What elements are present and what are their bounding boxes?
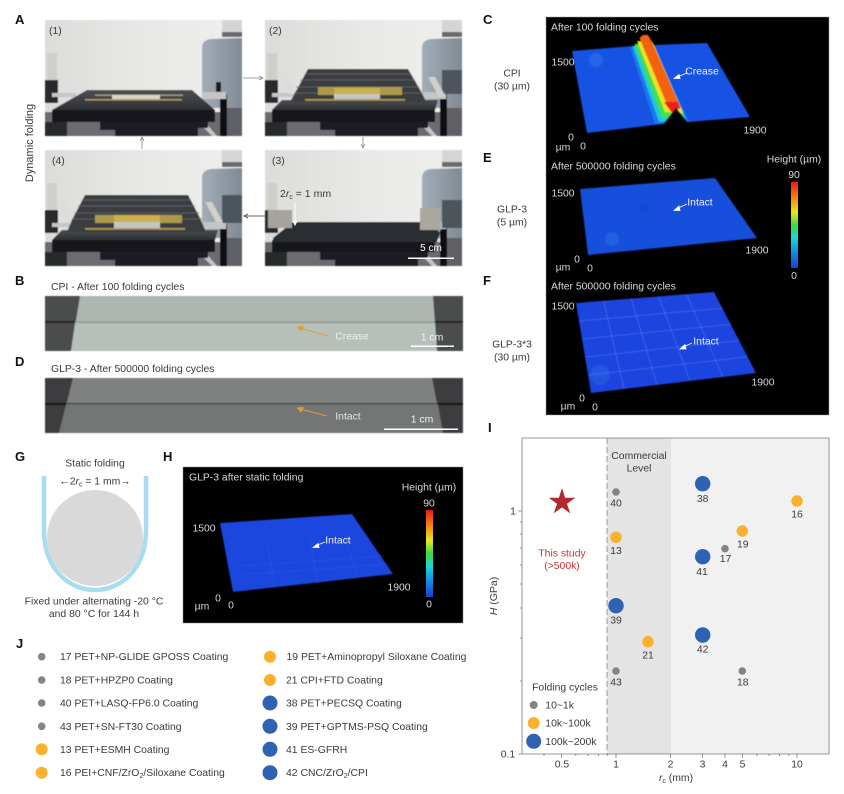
map F: GLP-3*3 intact surface: Intact — [693, 336, 719, 348]
panel letter I: I — [488, 420, 492, 435]
data points: 38 — [697, 494, 709, 505]
panel letter C: C — [483, 12, 493, 27]
x axis tick labels: 2 — [668, 760, 674, 770]
legend: folding cycles — [526, 682, 598, 749]
panel letter F: F — [483, 273, 491, 288]
right legend column: 39 PET+GPTMS-PSQ Coating — [286, 722, 428, 733]
height colour bar C/E/F: 90 — [788, 170, 800, 181]
data points: 39 — [610, 616, 622, 626]
left legend column — [36, 652, 229, 780]
y axis title: H (GPa) — [488, 577, 500, 615]
photo 4: rig unfolding — [45, 150, 242, 266]
panel letter H: H — [163, 449, 172, 464]
black panel H: µm — [195, 602, 209, 612]
blue film U shape — [44, 476, 146, 590]
x axis tick labels: 3 — [700, 760, 706, 770]
label (4): (4) — [52, 156, 65, 167]
heading B: CPI - After 100 folding cycles — [51, 282, 184, 293]
x axis tick labels: 0.5 — [555, 760, 569, 770]
right legend column: 19 PET+Aminopropyl Siloxane Coating — [286, 652, 467, 663]
left legend column: /Siloxane Coating — [143, 768, 225, 779]
legend: folding cycles: Folding cycles — [532, 682, 598, 694]
x axis tick labels: 5 — [740, 760, 746, 770]
data points: 43 — [610, 678, 622, 688]
shaded region right — [671, 438, 829, 754]
left legend column: 43 PET+SN-FT30 Coating — [60, 722, 182, 733]
arrow 2 to 3 — [361, 137, 365, 148]
map C: CPI crease surface: 0 — [580, 142, 586, 152]
left legend column: 18 PET+HPZP0 Coating — [60, 676, 173, 686]
x axis title: r — [659, 773, 663, 784]
label (3): (3) — [272, 156, 285, 167]
annotation 2rc = 1 mm: c — [289, 194, 293, 201]
panel letter E: E — [483, 150, 492, 165]
map F: GLP-3*3 intact surface — [551, 282, 775, 414]
data points: 40 — [610, 498, 622, 510]
map E: GLP-3 intact surface: 1500 — [551, 188, 575, 200]
map F: GLP-3*3 intact surface: 1900 — [751, 378, 775, 388]
map C: CPI crease surface: After 100 folding cycles — [551, 22, 658, 34]
right legend column: /CPI — [348, 768, 368, 779]
black panel: 3D height maps C, E, F — [546, 17, 829, 415]
black panel H: GLP-3 after static folding — [189, 472, 304, 484]
map E: GLP-3 intact surface: µm — [556, 262, 570, 274]
heading Static folding: Static folding — [65, 458, 125, 470]
annotation 2rc = 1 mm: = 1 mm — [293, 188, 331, 200]
panel B: CPI crease photo — [15, 273, 463, 351]
map E: GLP-3 intact surface — [551, 162, 769, 274]
panel D: GLP-3 intact photo — [15, 354, 463, 433]
height colour bar C/E/F — [767, 154, 821, 282]
photo D — [45, 378, 463, 433]
x axis title: c — [662, 778, 666, 785]
map E: GLP-3 intact surface: 0 — [574, 254, 580, 266]
rotated label: Dynamic folding: Dynamic folding — [24, 104, 36, 182]
black panel H: 0 — [215, 594, 221, 604]
panel A: dynamic folding photos — [15, 12, 462, 266]
dimension 2rc = 1 mm: c — [79, 482, 83, 488]
map F: GLP-3*3 intact surface: 0 — [579, 394, 585, 404]
black panel H: 0 — [228, 600, 234, 612]
data points: 18 — [737, 678, 749, 688]
sample label GLP-3*3 30 um: (30 µm) — [494, 352, 530, 364]
sample label GLP-3 5 um: (5 µm) — [497, 218, 527, 228]
x axis tick labels — [555, 760, 803, 770]
left legend column: 13 PET+ESMH Coating — [60, 745, 170, 756]
data points: 19 — [737, 540, 749, 550]
black panel H: Height (µm) — [402, 482, 456, 494]
right legend column: 2 — [344, 773, 348, 780]
height colour bar C/E/F: Height (µm) — [767, 154, 821, 166]
sample label GLP-3*3 30 um: GLP-3*3 — [492, 340, 532, 350]
panel G: static folding diagram — [15, 449, 164, 620]
label (2): (2) — [269, 26, 282, 37]
panel letter B: B — [15, 273, 24, 288]
x axis tick labels: 4 — [722, 760, 728, 770]
heading D: GLP-3 - After 500000 folding cycles — [51, 364, 214, 375]
dashed boundary — [606, 438, 608, 754]
height colour bar C/E/F: 0 — [791, 271, 797, 282]
panel letter G: G — [15, 449, 25, 464]
right legend column: 41 ES-GFRH — [286, 745, 347, 756]
label This study: (>500k) — [544, 561, 580, 572]
arrow 3 to 4 — [244, 214, 265, 218]
map C: CPI crease surface: 1500 — [551, 58, 575, 68]
scale bar 1 cm — [411, 332, 454, 347]
sample label GLP-3 5 um: GLP-3 — [497, 204, 527, 216]
map C: CPI crease surface — [551, 22, 767, 154]
sample label CPI: CPI — [503, 68, 521, 80]
right legend column: 21 CPI+FTD Coating — [286, 676, 383, 686]
y axis tick labels: 1 — [510, 506, 516, 518]
panel letter J: J — [16, 636, 23, 651]
caption: and 80 °C for 144 h — [49, 609, 139, 620]
data points: 41 — [696, 567, 708, 578]
photo 2: folding rig mid-fold — [265, 20, 462, 136]
black panel H: Intact — [325, 536, 351, 546]
data points: 16 — [791, 510, 803, 520]
plot frame and ticks — [518, 438, 829, 758]
map F: GLP-3*3 intact surface: µm — [561, 402, 575, 412]
panel letter A: A — [15, 12, 25, 27]
x axis tick labels: 10 — [791, 760, 803, 770]
legend: folding cycles: 10k~100k — [545, 718, 591, 730]
right legend column — [262, 651, 467, 780]
data points: 17 — [720, 554, 731, 565]
map E: GLP-3 intact surface: After 500000 folding cycles — [551, 162, 676, 172]
photo B — [45, 296, 463, 351]
photo 3: rig fully folded — [265, 150, 462, 266]
caption: Fixed under alternating -20 °C — [25, 596, 164, 608]
map E: GLP-3 intact surface: 0 — [587, 264, 593, 274]
x axis tick labels: 1 — [613, 760, 619, 770]
gray mandrel circle — [47, 490, 143, 586]
scale bar 1 cm: 1 cm — [421, 332, 443, 344]
left legend column: 2 — [139, 773, 143, 780]
annotation 2rc = 1 mm: 2r — [280, 188, 289, 200]
map E: GLP-3 intact surface: 1900 — [745, 246, 769, 256]
data points: 21 — [642, 650, 654, 662]
white arrow to fold — [293, 203, 297, 225]
label Intact: Intact — [335, 412, 361, 422]
label (1): (1) — [49, 26, 62, 37]
dimension 2rc = 1 mm: = 1 mm→ — [82, 476, 131, 488]
map C: CPI crease surface: 0 — [568, 132, 574, 144]
black panel H: 1900 — [387, 582, 411, 594]
data points — [608, 476, 803, 688]
map C: CPI crease surface: Crease — [685, 66, 719, 78]
arrow 4 to 1 — [140, 137, 144, 149]
map F: GLP-3*3 intact surface: 0 — [592, 402, 598, 414]
panel H: static folding height map — [163, 449, 463, 623]
black panel H: 0 — [426, 600, 432, 610]
black panel H: 90 — [423, 498, 435, 510]
label Crease: Crease — [335, 332, 369, 342]
scale bar 1 cm: 1 cm — [411, 414, 433, 426]
scale bar 5 cm — [408, 243, 454, 259]
x axis title: (mm) — [666, 773, 693, 784]
photo 1: folding rig open — [45, 20, 242, 136]
scale bar 5 cm: 5 cm — [420, 243, 442, 254]
label This study: This study — [538, 548, 586, 560]
map E: GLP-3 intact surface: Intact — [687, 198, 713, 208]
label Commercial Level: Level — [627, 464, 651, 474]
black panel H — [183, 467, 463, 623]
right legend column: 38 PET+PECSQ Coating — [286, 698, 402, 710]
shaded region commercial level — [607, 438, 671, 754]
legend: folding cycles: 100k~200k — [545, 737, 597, 748]
left legend column: 17 PET+NP-GLIDE GPOSS Coating — [60, 652, 229, 663]
label Commercial Level: Commercial — [611, 451, 667, 462]
left legend column: 40 PET+LASQ-FP6.0 Coating — [60, 698, 199, 710]
y axis tick labels: 0.1 — [501, 750, 515, 760]
data points: 42 — [697, 644, 709, 656]
right legend column: 42 CNC/ZrO — [286, 768, 344, 779]
orange arrow — [298, 408, 327, 416]
scale bar 1 cm — [384, 414, 458, 430]
panel I: hardness vs radius chart — [488, 420, 829, 785]
dimension 2rc = 1 mm: ←2r — [59, 476, 79, 488]
map C: CPI crease surface: 1900 — [743, 126, 767, 136]
y axis tick labels — [501, 506, 516, 760]
panel letter D: D — [15, 354, 24, 369]
sample label CPI: (30 µm) — [494, 82, 530, 92]
legend: folding cycles: 10~1k — [545, 700, 575, 712]
data points: 13 — [610, 546, 622, 557]
map F: GLP-3*3 intact surface: 1500 — [551, 302, 575, 312]
map F: GLP-3*3 intact surface: After 500000 folding cycles — [551, 282, 676, 292]
panel J: material legend — [16, 636, 467, 780]
black panel H: 1500 — [192, 524, 216, 534]
orange arrow — [298, 326, 328, 336]
left legend column: 16 PEI+CNF/ZrO — [60, 768, 139, 779]
map C: CPI crease surface: µm — [556, 142, 570, 154]
star: this study — [549, 488, 575, 513]
arrow 1 to 2 — [243, 76, 263, 80]
